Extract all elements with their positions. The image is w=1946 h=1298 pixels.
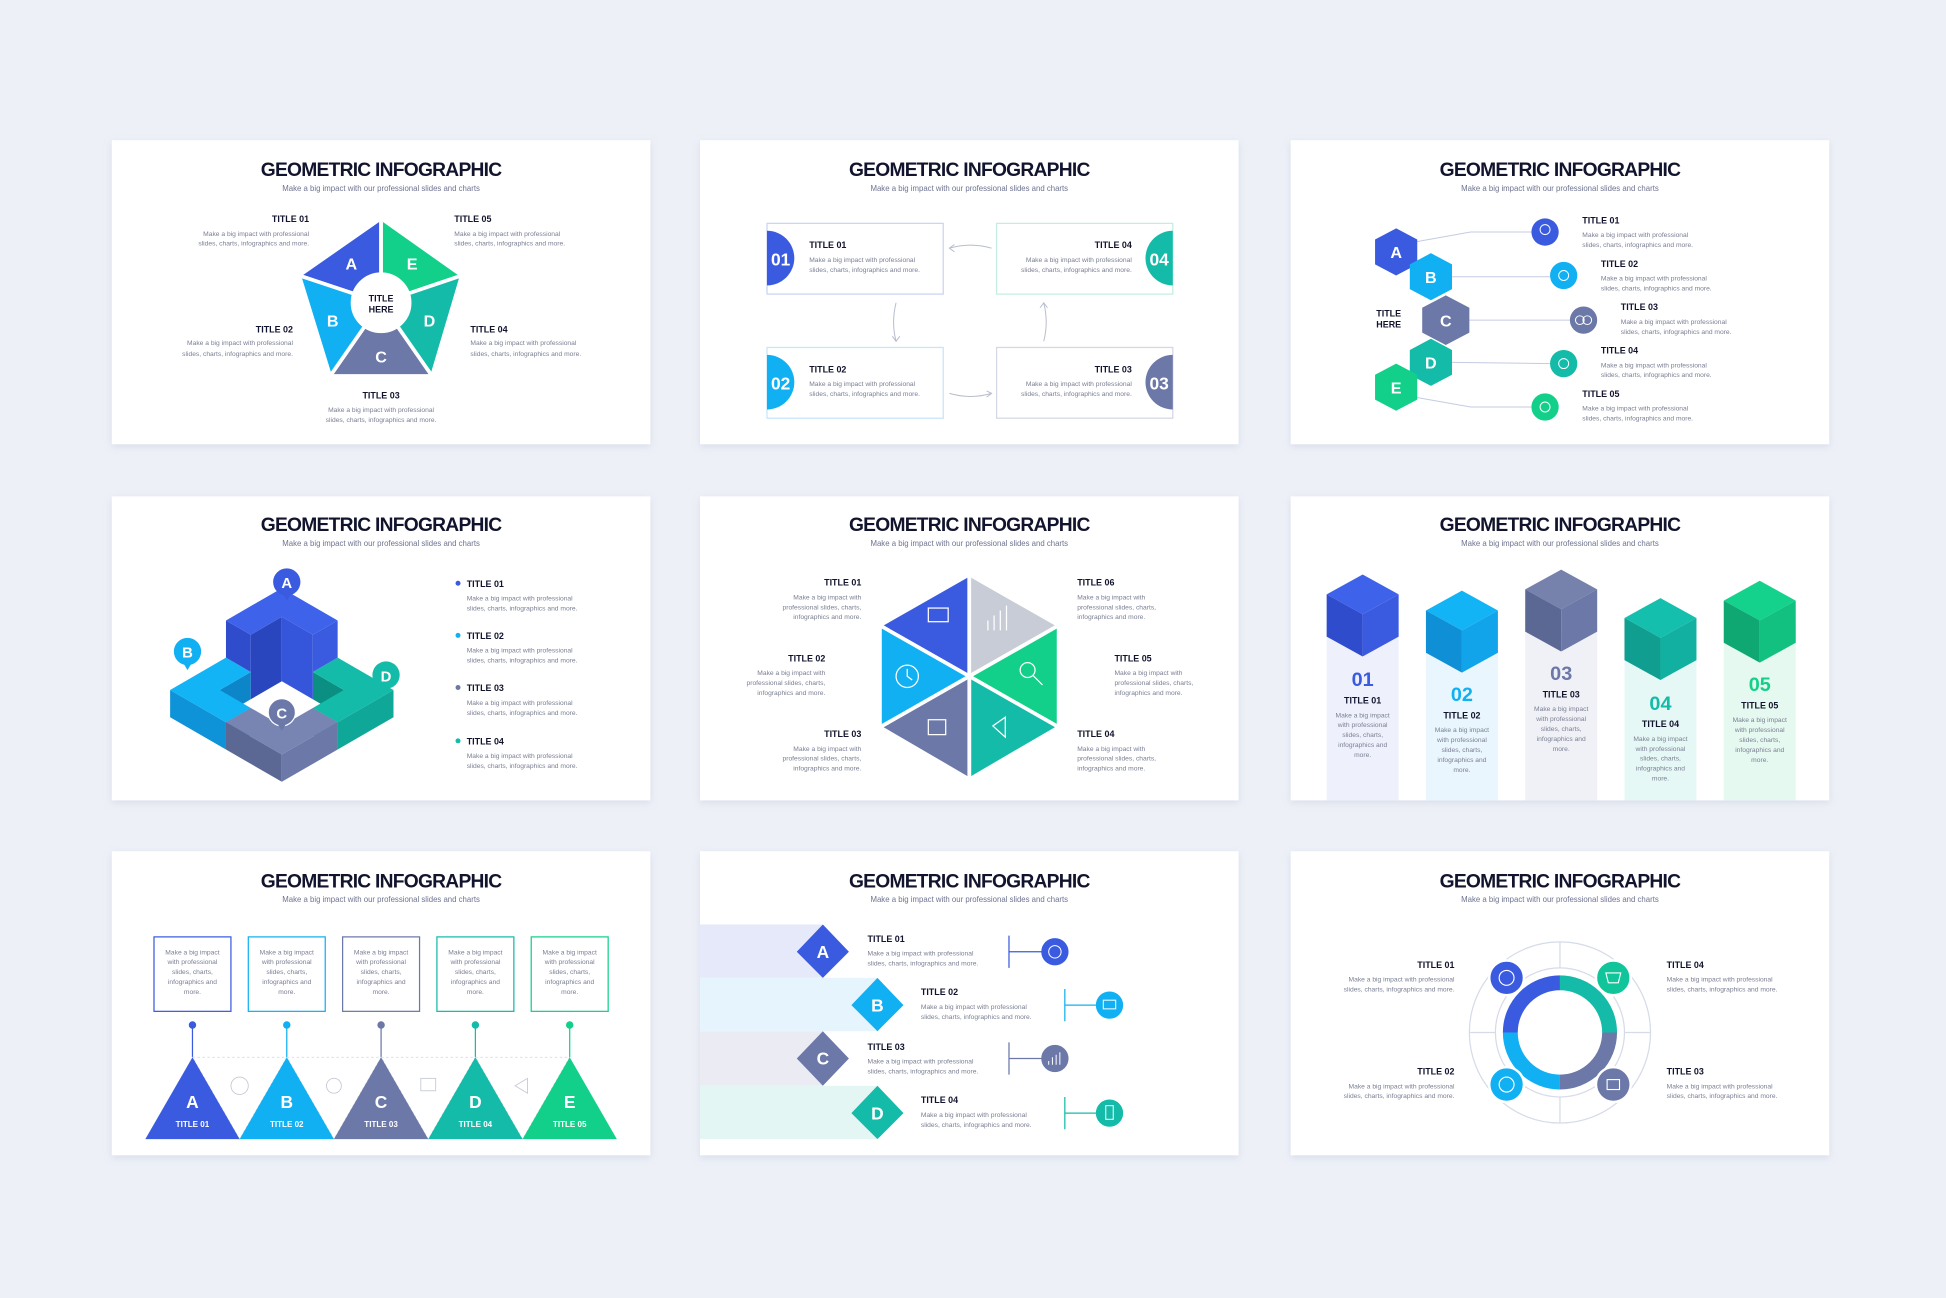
donut texts: TITLE 02 bbox=[1417, 1067, 1455, 1077]
box texts: Make a big impact with professional bbox=[1026, 257, 1132, 264]
diamonds: D bbox=[871, 1103, 884, 1123]
column texts: Make a big impact bbox=[1435, 727, 1489, 734]
panel: triangles slide: infographics and bbox=[451, 979, 500, 986]
panel: triangles slide: more. bbox=[278, 989, 295, 996]
panel: triangles slide: more. bbox=[561, 989, 578, 996]
icon circles bbox=[1531, 218, 1597, 421]
arrows bbox=[892, 244, 1047, 397]
triangles: TITLE 04 bbox=[459, 1120, 493, 1129]
texts: slides, charts, infographics and more. bbox=[1601, 372, 1712, 379]
diamonds: B bbox=[871, 995, 884, 1015]
list: slides, charts, infographics and more. bbox=[467, 606, 578, 613]
panel: triangles slide: with professional bbox=[167, 959, 218, 966]
column texts: TITLE 05 bbox=[1741, 701, 1778, 711]
text blocks: TITLE 03 bbox=[362, 390, 400, 400]
heading bbox=[849, 160, 1090, 193]
panel: triangles slide: more. bbox=[184, 989, 201, 996]
letter markers: B bbox=[182, 646, 193, 662]
icon circles bbox=[1489, 960, 1631, 1102]
panel: triangles slide: slides, charts, bbox=[455, 969, 496, 976]
list: slides, charts, infographics and more. bbox=[467, 763, 578, 770]
heading: Make a big impact with our professional slides and charts bbox=[1461, 184, 1659, 193]
panel: process boxes slide bbox=[700, 140, 1239, 444]
donut bbox=[1510, 983, 1610, 1082]
box texts: Make a big impact with professional bbox=[809, 257, 916, 264]
column texts: slides, charts, bbox=[1640, 756, 1681, 763]
labels: TITLE 05 bbox=[1114, 653, 1152, 663]
labels: Make a big impact with bbox=[1077, 746, 1146, 753]
band texts: Make a big impact with professional bbox=[868, 1058, 974, 1065]
heading: Make a big impact with our professional slides and charts bbox=[1461, 539, 1659, 548]
column texts: Make a big impact bbox=[1534, 706, 1588, 713]
texts: Make a big impact with professional bbox=[1621, 319, 1727, 326]
list: Make a big impact with professional bbox=[467, 700, 573, 707]
texts: slides, charts, infographics and more. bbox=[1621, 329, 1732, 336]
texts: TITLE 05 bbox=[1582, 389, 1620, 399]
box texts: TITLE 01 bbox=[809, 240, 846, 250]
panel: triangles slide: with professional bbox=[355, 959, 407, 966]
panel: triangles slide: with professional bbox=[449, 959, 501, 966]
panel: triangles slide: Make a big impact bbox=[543, 949, 597, 956]
labels: TITLE 01 bbox=[824, 578, 861, 588]
box texts: slides, charts, infographics and more. bbox=[809, 267, 920, 274]
labels: professional slides, charts, bbox=[783, 756, 861, 763]
text blocks: Make a big impact with professional bbox=[454, 231, 561, 238]
column texts: Make a big impact bbox=[1733, 717, 1787, 724]
number tabs: 04 bbox=[1149, 250, 1169, 270]
column texts: 04 bbox=[1649, 693, 1672, 715]
column texts: slides, charts, bbox=[1441, 747, 1483, 754]
panel: triangles slide: more. bbox=[467, 989, 484, 996]
column texts: TITLE 01 bbox=[1344, 696, 1381, 706]
heading: GEOMETRIC INFOGRAPHIC bbox=[849, 160, 1090, 181]
band texts bbox=[868, 934, 1032, 1129]
hexagons bbox=[1375, 228, 1469, 411]
column texts: infographics and bbox=[1338, 742, 1387, 749]
heading: GEOMETRIC INFOGRAPHIC bbox=[261, 871, 502, 892]
number tabs bbox=[767, 231, 1173, 410]
column texts: slides, charts, bbox=[1541, 726, 1582, 733]
column texts: infographics and bbox=[1735, 747, 1785, 754]
heading bbox=[261, 160, 502, 193]
labels: infographics and more. bbox=[793, 614, 861, 621]
column texts: 03 bbox=[1550, 663, 1572, 685]
panel: triangles slide: with professional bbox=[261, 959, 312, 966]
list: slides, charts, infographics and more. bbox=[467, 710, 578, 717]
letter markers: C bbox=[276, 706, 287, 722]
triangles: D bbox=[469, 1092, 482, 1112]
column texts: more. bbox=[1652, 776, 1669, 783]
column texts: with professional bbox=[1734, 727, 1785, 734]
triangles: E bbox=[564, 1092, 575, 1112]
texts: TITLE 02 bbox=[1601, 259, 1638, 269]
band texts: Make a big impact with professional bbox=[868, 951, 974, 958]
pins bbox=[189, 1021, 573, 1057]
panel: pentagon slide: C bbox=[375, 348, 387, 366]
list: TITLE 01 bbox=[467, 579, 504, 589]
column texts: slides, charts, bbox=[1739, 737, 1780, 744]
band texts: slides, charts, infographics and more. bbox=[868, 960, 978, 967]
donut texts: Make a big impact with professional bbox=[1349, 1083, 1455, 1090]
heading: Make a big impact with our professional slides and charts bbox=[282, 539, 480, 548]
text blocks: slides, charts, infographics and more. bbox=[326, 417, 437, 424]
letter markers bbox=[174, 568, 400, 731]
donut texts: slides, charts, infographics and more. bbox=[1344, 986, 1455, 993]
labels: professional slides, charts, bbox=[1077, 756, 1156, 763]
labels: TITLE 03 bbox=[824, 729, 861, 739]
column texts bbox=[1336, 663, 1787, 783]
column texts: with professional bbox=[1635, 746, 1686, 753]
panel: triangles slide bbox=[112, 851, 650, 1155]
heading: Make a big impact with our professional slides and charts bbox=[870, 184, 1068, 193]
column texts: 01 bbox=[1352, 669, 1374, 691]
column texts: more. bbox=[1553, 746, 1570, 753]
donut texts: Make a big impact with professional bbox=[1349, 977, 1455, 984]
text blocks: Make a big impact with professional bbox=[203, 231, 310, 238]
dashed inverted triangles with icons bbox=[192, 1057, 570, 1139]
hexagons: D bbox=[1425, 355, 1437, 373]
labels: infographics and more. bbox=[1077, 614, 1145, 621]
hexagons: A bbox=[1390, 244, 1402, 262]
heading: GEOMETRIC INFOGRAPHIC bbox=[261, 160, 502, 181]
column texts: 05 bbox=[1749, 674, 1771, 696]
hexagons: B bbox=[1425, 269, 1437, 287]
column texts: infographics and bbox=[1537, 736, 1586, 743]
box texts: Make a big impact with professional bbox=[1026, 381, 1132, 388]
labels: Make a big impact with bbox=[793, 594, 862, 601]
list: TITLE 04 bbox=[467, 737, 504, 747]
labels: professional slides, charts, bbox=[783, 604, 861, 611]
panel: triangles slide: Make a big impact bbox=[448, 949, 503, 956]
donut texts bbox=[1344, 960, 1778, 1100]
text blocks: TITLE 02 bbox=[256, 325, 293, 335]
band texts: TITLE 01 bbox=[868, 934, 905, 944]
heading: Make a big impact with our professional slides and charts bbox=[282, 895, 480, 904]
labels: TITLE 04 bbox=[1077, 729, 1114, 739]
donut texts: TITLE 04 bbox=[1667, 960, 1704, 970]
letter markers: D bbox=[381, 669, 392, 685]
list: Make a big impact with professional bbox=[467, 648, 573, 655]
triangles: A bbox=[186, 1092, 199, 1112]
heading: GEOMETRIC INFOGRAPHIC bbox=[849, 515, 1090, 536]
number tabs: 03 bbox=[1149, 374, 1169, 394]
donut texts: slides, charts, infographics and more. bbox=[1667, 1093, 1778, 1100]
labels: Make a big impact with bbox=[1077, 594, 1146, 601]
band texts: Make a big impact with professional bbox=[921, 1112, 1027, 1119]
column texts: infographics and bbox=[1437, 757, 1487, 764]
list: Make a big impact with professional bbox=[467, 753, 573, 760]
heading bbox=[261, 515, 502, 548]
diamonds: A bbox=[817, 942, 830, 962]
box texts bbox=[809, 240, 1132, 398]
list: slides, charts, infographics and more. bbox=[467, 658, 578, 665]
text blocks: Make a big impact with professional bbox=[328, 407, 435, 414]
column texts: 02 bbox=[1451, 684, 1473, 706]
band texts: TITLE 03 bbox=[868, 1042, 905, 1052]
column texts: with professional bbox=[1337, 722, 1388, 729]
panel: pentagon slide: B bbox=[327, 312, 339, 330]
column texts: TITLE 02 bbox=[1443, 710, 1481, 720]
hexagons: E bbox=[1391, 379, 1402, 397]
icons bbox=[896, 606, 1042, 737]
box texts: TITLE 04 bbox=[1095, 240, 1132, 250]
box texts: TITLE 03 bbox=[1095, 364, 1132, 374]
donut texts: TITLE 03 bbox=[1667, 1067, 1704, 1077]
column texts: with professional bbox=[1436, 737, 1487, 744]
column texts: more. bbox=[1751, 757, 1768, 764]
pentagon chart bbox=[299, 218, 462, 376]
donut texts: slides, charts, infographics and more. bbox=[1667, 986, 1778, 993]
panel: pentagon slide: D bbox=[424, 312, 435, 330]
labels: infographics and more. bbox=[793, 766, 861, 773]
column texts: TITLE 04 bbox=[1642, 719, 1679, 729]
labels: infographics and more. bbox=[757, 690, 825, 697]
texts bbox=[1582, 215, 1732, 423]
text blocks bbox=[182, 214, 581, 424]
box texts: slides, charts, infographics and more. bbox=[1021, 267, 1132, 274]
panel: isometric ring slide bbox=[112, 496, 650, 800]
box texts: slides, charts, infographics and more. bbox=[1021, 391, 1132, 398]
labels: Make a big impact with bbox=[757, 670, 826, 677]
triangles: TITLE 01 bbox=[176, 1120, 210, 1129]
hexagons: TITLE bbox=[1376, 308, 1401, 318]
heading bbox=[849, 871, 1090, 904]
panel: pentagon slide: HERE bbox=[369, 305, 394, 315]
heading: Make a big impact with our professional slides and charts bbox=[282, 184, 480, 193]
hexagon wheel bbox=[880, 575, 1059, 779]
column texts: Make a big impact bbox=[1336, 712, 1390, 719]
text blocks: slides, charts, infographics and more. bbox=[198, 241, 309, 248]
band texts: Make a big impact with professional bbox=[921, 1004, 1027, 1011]
text blocks: slides, charts, infographics and more. bbox=[454, 241, 565, 248]
labels: TITLE 06 bbox=[1077, 578, 1114, 588]
heading: GEOMETRIC INFOGRAPHIC bbox=[1440, 160, 1681, 181]
heading: GEOMETRIC INFOGRAPHIC bbox=[261, 515, 502, 536]
blue tall segment bbox=[226, 588, 338, 699]
panel: diamond bands slide bbox=[700, 851, 1239, 1155]
texts: Make a big impact with professional bbox=[1601, 362, 1707, 369]
hexagons: C bbox=[1440, 312, 1452, 330]
band texts: slides, charts, infographics and more. bbox=[921, 1014, 1032, 1021]
panel: triangles slide: slides, charts, bbox=[172, 969, 213, 976]
texts: Make a big impact with professional bbox=[1601, 275, 1707, 282]
bands bbox=[700, 924, 877, 1139]
panel: triangles slide: infographics and bbox=[357, 979, 406, 986]
box texts: slides, charts, infographics and more. bbox=[809, 391, 920, 398]
triangles: TITLE 05 bbox=[553, 1120, 587, 1129]
panel: triangles slide: slides, charts, bbox=[266, 969, 307, 976]
donut texts: Make a big impact with professional bbox=[1667, 977, 1773, 984]
list: Make a big impact with professional bbox=[467, 596, 573, 603]
box texts: Make a big impact with professional bbox=[809, 381, 916, 388]
panel: pentagon slide bbox=[112, 140, 650, 444]
teal segment bbox=[313, 658, 393, 750]
letter markers: A bbox=[281, 576, 292, 592]
triangles: B bbox=[280, 1092, 293, 1112]
panel: triangles slide: infographics and bbox=[168, 979, 217, 986]
number tabs: 02 bbox=[771, 374, 790, 394]
connector lines bbox=[1415, 232, 1570, 407]
panel: triangles slide: Make a big impact bbox=[260, 949, 314, 956]
heading bbox=[1440, 515, 1681, 548]
texts: Make a big impact with professional bbox=[1582, 232, 1689, 239]
panel: triangles slide: infographics and bbox=[262, 979, 312, 986]
panel: hexagon chain slide bbox=[1291, 140, 1829, 444]
triangles: TITLE 02 bbox=[270, 1120, 304, 1129]
list bbox=[456, 579, 578, 770]
panel: pentagon slide: E bbox=[407, 255, 418, 273]
labels: professional slides, charts, bbox=[1077, 604, 1156, 611]
column texts: infographics and bbox=[1636, 766, 1685, 773]
cubes bbox=[1327, 570, 1796, 680]
heading: GEOMETRIC INFOGRAPHIC bbox=[1440, 871, 1681, 892]
labels: Make a big impact with bbox=[1114, 670, 1183, 677]
band texts: TITLE 04 bbox=[921, 1095, 958, 1105]
labels: professional slides, charts, bbox=[1114, 680, 1193, 687]
donut texts: slides, charts, infographics and more. bbox=[1344, 1093, 1455, 1100]
heading: GEOMETRIC INFOGRAPHIC bbox=[1440, 515, 1681, 536]
panel: pentagon slide: TITLE bbox=[369, 294, 394, 304]
texts: slides, charts, infographics and more. bbox=[1601, 285, 1712, 292]
text blocks: Make a big impact with professional bbox=[187, 340, 293, 347]
band texts: slides, charts, infographics and more. bbox=[921, 1122, 1032, 1129]
panel: pentagon slide: A bbox=[345, 255, 357, 273]
texts: TITLE 04 bbox=[1601, 346, 1638, 356]
heading: Make a big impact with our professional slides and charts bbox=[870, 895, 1068, 904]
text blocks: TITLE 04 bbox=[470, 325, 508, 335]
band texts: TITLE 02 bbox=[921, 987, 958, 997]
labels: infographics and more. bbox=[1077, 766, 1145, 773]
labels: infographics and more. bbox=[1114, 690, 1183, 697]
heading bbox=[1440, 160, 1681, 193]
column texts: slides, charts, bbox=[1342, 732, 1383, 739]
diamonds bbox=[797, 924, 904, 1139]
triangles bbox=[145, 1057, 617, 1139]
diamonds: C bbox=[817, 1049, 830, 1069]
texts: Make a big impact with professional bbox=[1582, 406, 1689, 413]
connectors and icons bbox=[1009, 936, 1123, 1129]
heading bbox=[1440, 871, 1681, 904]
labels bbox=[747, 578, 1193, 773]
panel: triangles slide: more. bbox=[373, 989, 390, 996]
triangles: TITLE 03 bbox=[364, 1120, 398, 1129]
labels: Make a big impact with bbox=[793, 746, 862, 753]
panel: triangles slide: Make a big impact bbox=[354, 949, 408, 956]
text blocks: Make a big impact with professional bbox=[470, 340, 577, 347]
gray segment bbox=[226, 708, 338, 782]
number tabs: 01 bbox=[771, 250, 791, 270]
heading bbox=[261, 871, 502, 904]
texts: slides, charts, infographics and more. bbox=[1582, 242, 1693, 249]
boxes bbox=[767, 223, 1173, 418]
box texts: TITLE 02 bbox=[809, 364, 846, 374]
text boxes bbox=[154, 937, 608, 1011]
column texts: with professional bbox=[1535, 716, 1587, 723]
donut texts: TITLE 01 bbox=[1417, 960, 1455, 970]
column texts: more. bbox=[1354, 752, 1371, 759]
hexagons: HERE bbox=[1376, 320, 1401, 330]
isometric ring bbox=[170, 588, 393, 782]
labels: professional slides, charts, bbox=[747, 680, 825, 687]
list: TITLE 03 bbox=[467, 683, 504, 693]
text blocks: TITLE 05 bbox=[454, 214, 492, 224]
labels: TITLE 02 bbox=[788, 653, 825, 663]
panel: triangles slide: slides, charts, bbox=[361, 969, 402, 976]
heading: Make a big impact with our professional slides and charts bbox=[870, 539, 1068, 548]
column texts: TITLE 03 bbox=[1543, 689, 1580, 699]
triangles: C bbox=[375, 1092, 388, 1112]
heading: GEOMETRIC INFOGRAPHIC bbox=[849, 871, 1090, 892]
texts: slides, charts, infographics and more. bbox=[1582, 416, 1693, 423]
heading bbox=[849, 515, 1090, 548]
panel: donut slide bbox=[1291, 851, 1829, 1155]
panel: cubes slide bbox=[1291, 496, 1829, 800]
column backgrounds bbox=[1327, 614, 1796, 800]
donut texts: Make a big impact with professional bbox=[1667, 1083, 1773, 1090]
column texts: more. bbox=[1453, 767, 1471, 774]
column texts: Make a big impact bbox=[1633, 736, 1688, 743]
text blocks: slides, charts, infographics and more. bbox=[182, 351, 293, 358]
panel: triangles slide: with professional bbox=[544, 959, 595, 966]
panel: triangles slide: infographics and bbox=[545, 979, 595, 986]
list: TITLE 02 bbox=[467, 631, 504, 641]
band texts: slides, charts, infographics and more. bbox=[868, 1068, 978, 1075]
panel: triangles slide: slides, charts, bbox=[549, 969, 590, 976]
light blue segment bbox=[170, 658, 251, 750]
outer ring bbox=[1469, 942, 1651, 1123]
heading: Make a big impact with our professional slides and charts bbox=[1461, 895, 1659, 904]
texts: TITLE 01 bbox=[1582, 215, 1620, 225]
text blocks: TITLE 01 bbox=[272, 214, 309, 224]
texts: TITLE 03 bbox=[1621, 302, 1658, 312]
text blocks: slides, charts, infographics and more. bbox=[470, 351, 581, 358]
panel: hexagon wheel slide bbox=[700, 496, 1239, 800]
panel: triangles slide: Make a big impact bbox=[165, 949, 220, 956]
